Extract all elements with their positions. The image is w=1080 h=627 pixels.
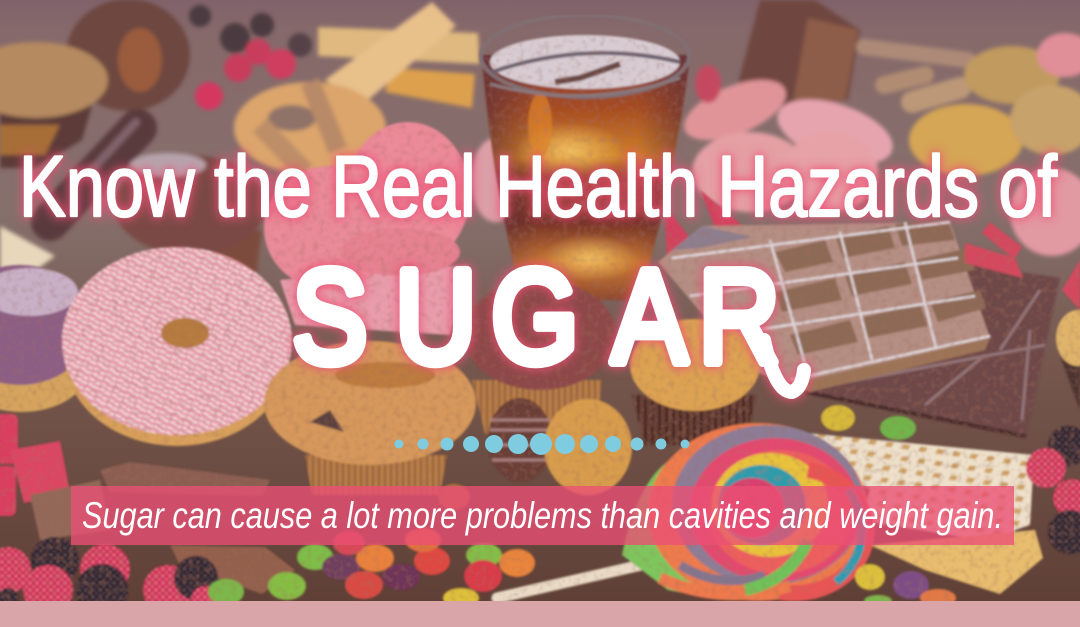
footer band: [0, 601, 1080, 627]
dotted divider: [394, 433, 690, 455]
subtitle banner: [71, 486, 1014, 545]
orange muffin: [630, 319, 760, 445]
ice cream: [264, 122, 470, 335]
wafers top: [318, 2, 480, 108]
red candies right: [965, 222, 1080, 310]
candy sticks left: [0, 414, 70, 516]
wafer donut: [234, 82, 386, 174]
title word sugar: SUGAR: [292, 242, 780, 390]
waffle wafer: [785, 431, 1034, 545]
berries bottom left: [0, 537, 219, 616]
glass of soda: [481, 15, 690, 300]
pink donuts right: [676, 65, 901, 212]
cookies top right: [909, 33, 1080, 256]
berries top: [189, 5, 312, 110]
chocolate candy: [30, 462, 295, 594]
left muffin: [0, 42, 108, 168]
chocolate muffin with sugar: [114, 153, 266, 278]
lower wafer: [870, 530, 1043, 594]
milk chocolate bar: [658, 220, 990, 392]
coloured candies: [208, 484, 535, 608]
big pink donut: [62, 247, 292, 446]
front muffin: [264, 341, 476, 495]
red candies middle: [660, 190, 750, 270]
dark muffin top left: [66, 0, 190, 111]
chocolate chip muffin back: [464, 280, 616, 434]
back chocolate muffin: [735, 0, 860, 108]
small wafer left: [0, 226, 55, 282]
small pink donut behind glass: [471, 138, 519, 222]
swash tail of letter R: [764, 340, 804, 392]
lollipop stick: [497, 558, 672, 598]
biscuits top right: [864, 47, 968, 102]
candy row by chocolate: [821, 405, 916, 440]
background foods, top row: [0, 0, 1080, 282]
right cut muffin: [1056, 310, 1080, 410]
berries right: [1026, 426, 1080, 554]
cut muffin: [488, 398, 632, 495]
dark chocolate bar: [806, 262, 1060, 436]
lollipop: [622, 423, 868, 601]
chocolate bar: [50, 122, 138, 222]
title: [19, 139, 1058, 392]
purple donut: [0, 265, 92, 412]
candies bottom right: [855, 564, 956, 607]
